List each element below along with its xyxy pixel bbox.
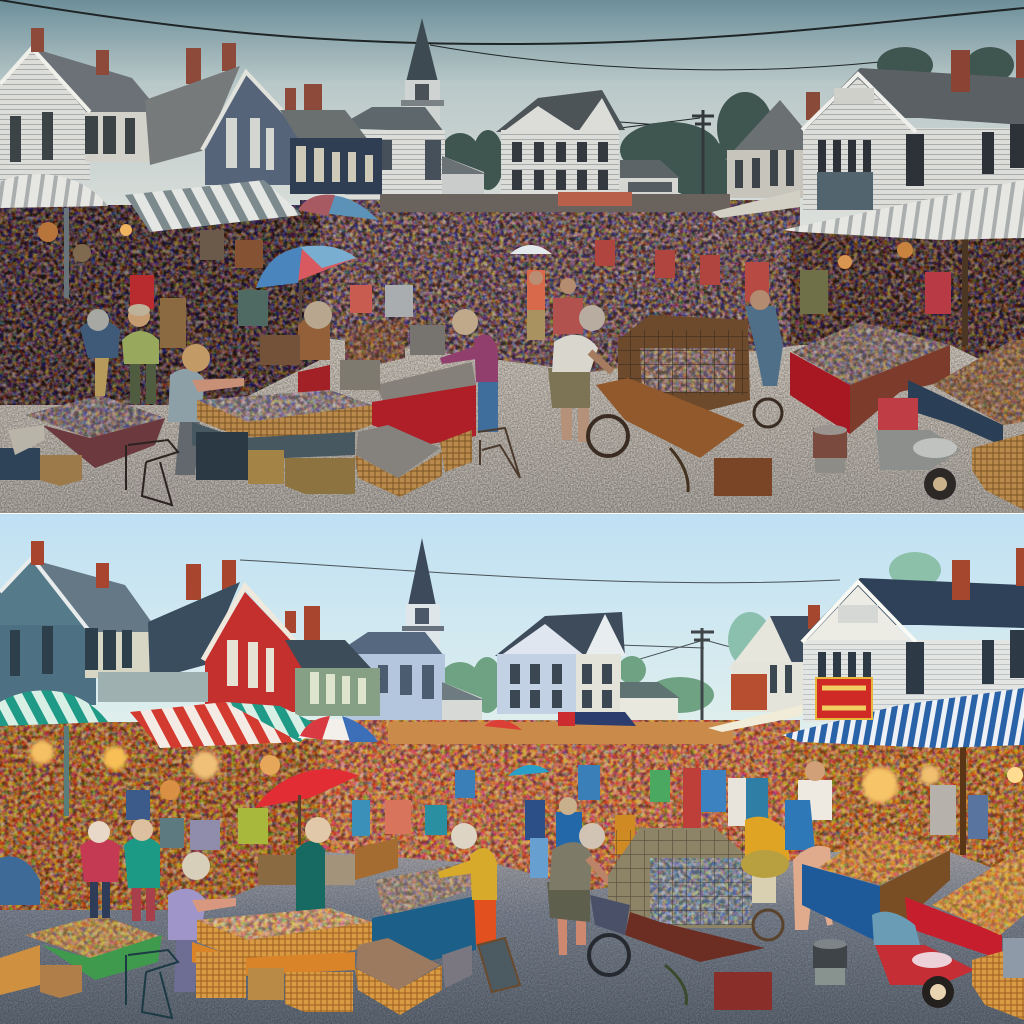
green row building <box>285 640 382 716</box>
right striped awning <box>782 180 1024 240</box>
red sign <box>816 678 872 719</box>
blue draped table <box>372 896 476 962</box>
mid right house bottom <box>728 605 825 712</box>
panel: vivid market scene <box>0 514 1024 1024</box>
center house bottom <box>495 612 680 722</box>
person: red cardigan <box>80 821 120 918</box>
right stall goods wall <box>790 232 1024 380</box>
right white house bottom <box>800 548 1024 722</box>
right red table with trays <box>905 850 1024 960</box>
panel: muted market scene <box>0 0 1024 513</box>
framed picture <box>478 938 520 992</box>
right blue table with tray <box>908 340 1024 446</box>
utility wires <box>240 560 840 665</box>
distant glowing stalls <box>388 722 733 744</box>
distant red awnings <box>484 712 636 730</box>
person: yellow sweater <box>438 823 497 945</box>
left teal house <box>0 558 160 705</box>
green striped awning <box>225 702 320 742</box>
porch balcony <box>98 672 208 702</box>
person: teal cardigan <box>124 819 160 921</box>
right white house <box>800 40 1024 212</box>
small distant umbrella <box>510 245 552 254</box>
folding chair <box>126 440 178 505</box>
person: seller in brown <box>298 301 332 360</box>
street surface <box>0 320 1024 513</box>
vivid crowd <box>300 720 800 890</box>
bucket <box>813 939 847 985</box>
utility pole <box>692 110 714 215</box>
overhead wires <box>0 0 1024 128</box>
left dome awning <box>0 174 108 298</box>
red draped table <box>372 385 476 445</box>
church bottom <box>335 538 484 724</box>
red cooler <box>878 398 918 430</box>
person: yellow shirt <box>741 817 790 903</box>
person: green sweater child <box>122 304 159 404</box>
left glowing goods wall <box>0 722 320 910</box>
mid-crowd figures <box>130 240 951 348</box>
red house <box>148 582 308 712</box>
wicker basket <box>355 425 472 497</box>
left green table <box>25 915 165 980</box>
person: pink trousers bending <box>785 800 832 930</box>
vivid mid figures <box>126 761 988 878</box>
sky <box>0 0 1024 240</box>
church <box>335 18 486 205</box>
red striped awning <box>130 702 300 748</box>
right blue table <box>802 832 950 943</box>
right red table <box>790 322 950 434</box>
person: man in white shirt <box>548 305 612 442</box>
barrel <box>813 425 847 473</box>
person: left edge vendor <box>0 856 40 905</box>
utility pole bottom <box>691 628 714 724</box>
center display case bottom <box>192 908 372 1012</box>
street grain bottom <box>0 840 1024 1024</box>
distant red awning <box>558 192 632 206</box>
goods cases bottom <box>258 838 476 918</box>
street bottom <box>0 840 1024 1024</box>
mid right house <box>725 92 830 198</box>
crowd <box>300 200 800 372</box>
center striped awning <box>125 180 302 232</box>
awning far umbrella <box>298 195 378 220</box>
chimneys bottom left <box>31 541 320 644</box>
mid right shop awning <box>712 190 800 218</box>
person: lavender shirt <box>168 852 236 992</box>
person: blue jacket <box>80 309 120 396</box>
small easel <box>478 428 520 478</box>
far umbrella <box>298 716 378 742</box>
trees <box>440 552 941 713</box>
chimneys left <box>31 28 322 122</box>
background trees <box>440 47 1014 198</box>
right wicker basket bottom <box>972 938 1024 1020</box>
big market umbrella <box>256 246 356 342</box>
red umbrella <box>255 769 358 845</box>
vintage cart <box>588 315 782 496</box>
red cloth on stool <box>298 365 330 398</box>
left crates <box>0 945 82 998</box>
street grain <box>0 320 1024 513</box>
left house white <box>0 48 162 180</box>
mid right shop awning bottom <box>708 705 802 732</box>
person: behind cart <box>745 290 783 386</box>
left blue-grey house <box>145 66 306 185</box>
right wicker basket <box>972 434 1024 510</box>
scooter <box>876 430 960 500</box>
teal chair <box>126 950 178 1018</box>
distant stall band <box>380 194 730 212</box>
row of buildings <box>280 110 382 194</box>
left stall goods wall <box>0 205 320 405</box>
left storage box <box>0 425 82 486</box>
green dome awning <box>0 690 108 816</box>
right glowing goods wall <box>785 738 1024 880</box>
center house <box>496 90 680 202</box>
person: grey olive man <box>547 823 612 955</box>
center display case <box>192 390 372 494</box>
vintage cart bottom <box>589 828 783 1010</box>
person: teal seller <box>296 817 331 918</box>
wicker basket bottom <box>355 938 472 1015</box>
left table <box>25 395 165 468</box>
red cushion chair <box>872 912 975 1008</box>
blue striped awning <box>782 688 1024 748</box>
person: pale blue shirt <box>168 344 244 475</box>
bottom sky <box>0 514 1024 764</box>
person: magenta sweater <box>440 309 498 432</box>
goods cases <box>260 318 476 405</box>
teal small umbrella <box>508 765 550 776</box>
